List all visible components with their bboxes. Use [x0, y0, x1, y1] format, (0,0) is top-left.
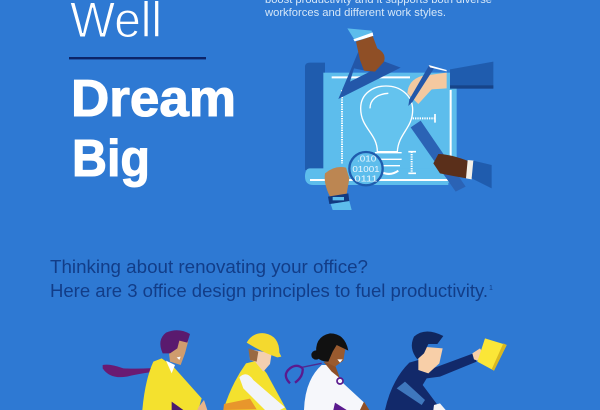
magnifying glass with binary	[349, 152, 383, 185]
subheading text block: Thinking about renovating your office?	[50, 257, 368, 277]
yellow note	[477, 338, 507, 371]
heading: Dream Big: Dream	[71, 70, 236, 128]
divider line under title	[69, 57, 206, 59]
lightbulb drawing	[361, 86, 413, 174]
illustration: blueprint with hands	[305, 28, 493, 210]
intro text block	[264, 0, 492, 19]
magnifying glass with binary: 0111	[354, 174, 378, 184]
person: businessman with tie	[103, 330, 207, 410]
person: construction worker with hard hat	[223, 333, 287, 410]
subheading text block: Here are 3 office design principles to fuel productivity.	[50, 281, 488, 301]
drawing hand with pencil	[407, 62, 493, 106]
magnifying glass with binary: .010	[357, 154, 377, 164]
ruler and lower hand	[411, 121, 492, 192]
magnifying glass with binary: 01001	[352, 164, 380, 174]
subheading text block	[50, 257, 493, 301]
heading: Dream Big: Big	[72, 130, 150, 188]
blueprint paper	[305, 63, 457, 185]
set square and upper hand	[338, 28, 401, 99]
lower left hand with wristband	[325, 167, 352, 210]
intro text block: workforces and different work styles.	[264, 7, 446, 19]
person: man reaching for yellow note	[385, 331, 507, 410]
subheading text block: 1	[489, 285, 493, 292]
person: doctor with stethoscope	[286, 333, 369, 410]
heading: Dream Big	[71, 70, 236, 188]
